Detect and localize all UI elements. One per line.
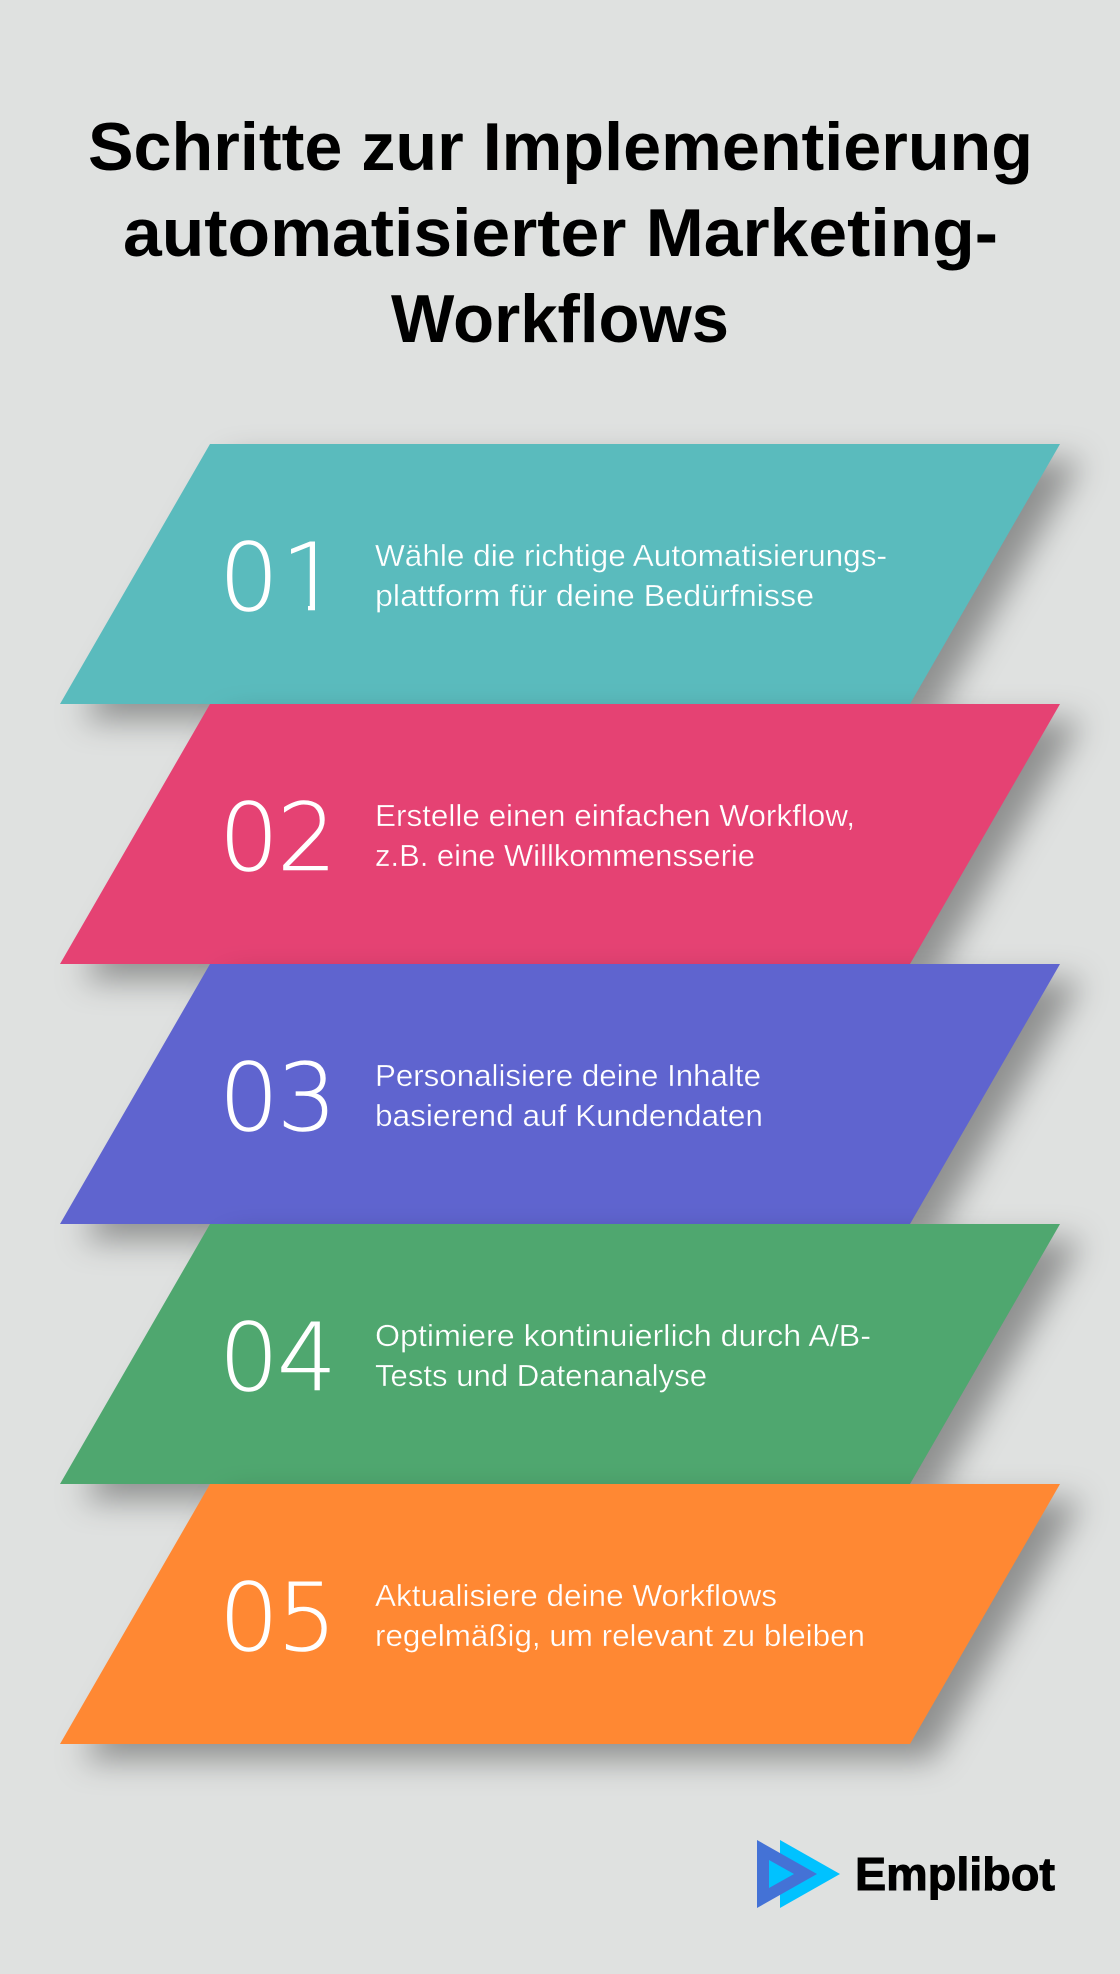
text: step 05 bbox=[375, 1578, 865, 1653]
text: step 02: z.B. eine Willkommensserie bbox=[375, 838, 755, 873]
title bbox=[88, 109, 1033, 357]
title: Schritte zur Implementierung bbox=[88, 109, 1033, 185]
text: step 05: regelmäßig, um relevant zu bleiben bbox=[375, 1618, 865, 1653]
title: automatisierter Marketing- bbox=[123, 195, 998, 271]
panel: step 02 bbox=[60, 704, 1082, 980]
icon: play triangles bbox=[757, 1840, 840, 1908]
text: step 05: Aktualisiere deine Workflows bbox=[375, 1578, 777, 1613]
title: Workflows bbox=[391, 281, 729, 357]
text: step 02: Erstelle einen einfachen Workflow, bbox=[375, 798, 855, 833]
text: step 01 bbox=[375, 538, 887, 613]
panel: step 05 bbox=[60, 1484, 1082, 1760]
text: step 02 bbox=[375, 798, 855, 873]
text: step 04: Tests und Datenanalyse bbox=[375, 1358, 707, 1393]
text: step 01: plattform für deine Bedürfnisse bbox=[375, 578, 814, 613]
wordmark: Emplibot bbox=[855, 1848, 1055, 1900]
text: step 01: Wähle die richtige Automatisierungs- bbox=[375, 538, 887, 573]
panel: step 03 bbox=[60, 964, 1082, 1240]
number 02: 02 bbox=[219, 784, 337, 893]
text: step 03: Personalisiere deine Inhalte bbox=[375, 1058, 761, 1093]
text: step 03: basierend auf Kundendaten bbox=[375, 1098, 763, 1133]
panel: step 04 bbox=[60, 1224, 1082, 1500]
logo: Emplibot bbox=[757, 1840, 1055, 1908]
number 04: 04 bbox=[219, 1304, 337, 1413]
number 01: 01 bbox=[219, 524, 341, 633]
number 03: 03 bbox=[219, 1044, 337, 1153]
number 05: 05 bbox=[219, 1564, 337, 1673]
text: step 04 bbox=[375, 1318, 871, 1393]
text: step 03 bbox=[375, 1058, 763, 1133]
text: step 04: Optimiere kontinuierlich durch A/B- bbox=[375, 1318, 871, 1353]
panel: step 01 bbox=[60, 444, 1082, 720]
